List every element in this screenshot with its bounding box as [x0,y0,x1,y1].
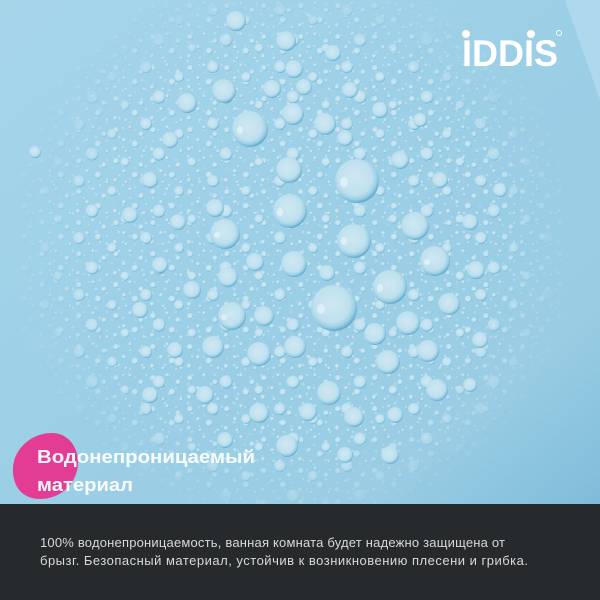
description text: 100% водонепроницаемость, ванная комната будет надежно защищена от [40,535,505,550]
description text: брызг. Безопасный материал, устойчив к возникновению плесени и грибка. [40,553,528,568]
heading [37,447,255,495]
heading: Водонепроницаемый [37,447,255,467]
logo: IDDIS: IDDIS [462,33,558,74]
description text [40,535,528,568]
heading: материал [37,475,133,495]
large drops [29,11,507,464]
pink blob [13,433,78,499]
drop highlights [214,126,430,320]
dark footer panel [0,504,600,600]
